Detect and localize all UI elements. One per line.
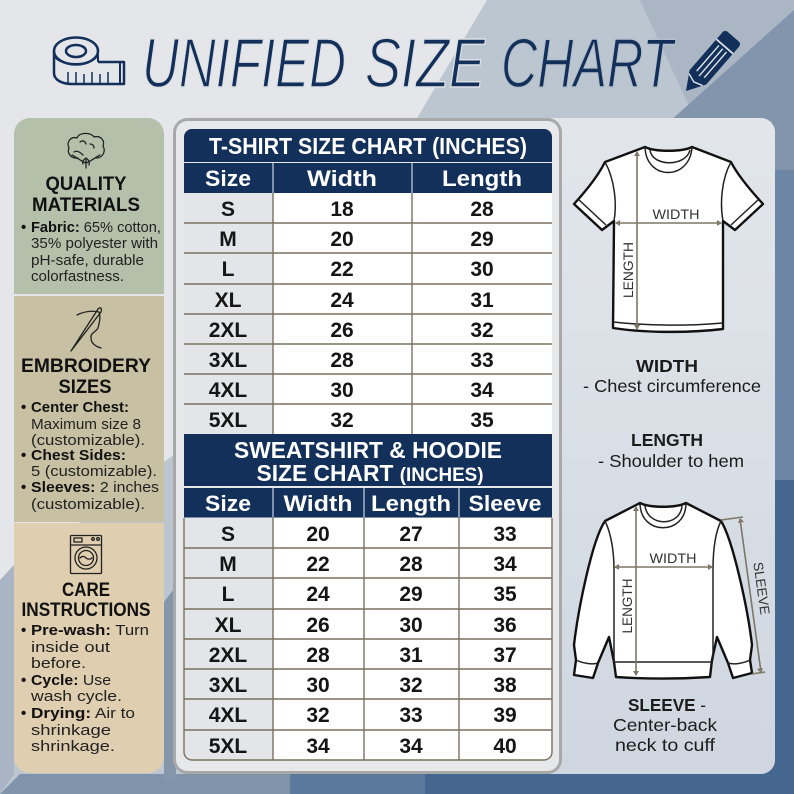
table body rows: 30 <box>306 674 330 697</box>
text block: care details: Drying: Air to <box>31 705 135 722</box>
icon: measuring tape <box>54 38 124 84</box>
icon: washing machine <box>70 536 102 574</box>
table header row: Sleeve <box>468 491 542 516</box>
table header row: Size <box>205 491 251 516</box>
table: t-shirt size chart <box>184 129 552 434</box>
length arrow <box>621 151 640 330</box>
table header row: Length <box>442 166 522 191</box>
text block: sleeve description: neck to cuff <box>615 735 715 755</box>
table body rows: 30 <box>330 379 354 402</box>
heading <box>21 356 151 398</box>
table body rows: 4XL <box>209 704 247 727</box>
text block: length description: - Shoulder to hem <box>598 451 744 471</box>
icon: pencil <box>678 29 742 98</box>
table body rows: 31 <box>470 289 494 312</box>
text block: fabric: colorfastness. <box>31 268 124 285</box>
text block: care details: Pre-wash: Turn <box>31 622 149 639</box>
table body rows <box>184 193 552 434</box>
table body rows: 24 <box>330 289 354 312</box>
table body rows: 34 <box>470 379 494 402</box>
panel: embroidery sizes <box>14 296 164 522</box>
table body rows: 30 <box>399 614 423 637</box>
heading: INSTRUCTIONS <box>22 600 150 621</box>
text block: care details: shrinkage. <box>31 738 115 755</box>
text block: fabric: Fabric: 65% cotton, <box>31 219 161 236</box>
text block: embroidery details: (customizable). <box>31 432 145 449</box>
text block: width description <box>583 356 761 396</box>
table body rows: 32 <box>306 704 330 727</box>
text block: embroidery details: • <box>21 447 26 464</box>
table body rows: M <box>219 553 237 576</box>
text block: embroidery details <box>21 399 159 513</box>
panel: table frame <box>174 120 560 772</box>
table body rows: 37 <box>493 644 517 667</box>
table body rows: XL <box>215 614 242 637</box>
table body rows: 5XL <box>209 409 247 432</box>
heading: sweatshirt chart: SIZE CHART (INCHES) <box>256 460 484 486</box>
text block: length description <box>598 430 744 471</box>
heading: CARE <box>62 580 110 601</box>
table body rows: 33 <box>399 704 423 727</box>
table body rows: 20 <box>330 228 354 251</box>
table body rows: 18 <box>330 198 354 221</box>
text block: care details: • <box>21 622 26 639</box>
table body rows: 32 <box>399 674 423 697</box>
table body rows: 3XL <box>209 674 247 697</box>
text block: care details: wash cycle. <box>30 688 122 705</box>
table body rows: 38 <box>493 674 517 697</box>
heading: t-shirt chart: T-SHIRT SIZE CHART (INCHES) <box>209 133 527 159</box>
text block: care details: • <box>21 672 26 689</box>
text block: fabric: 35% polyester with <box>31 235 158 252</box>
title: CHART <box>501 24 676 102</box>
table body rows: S <box>221 198 235 221</box>
text block: care details: shrinkage <box>31 722 111 739</box>
icon: needle <box>71 308 101 351</box>
table body rows: 33 <box>493 523 517 546</box>
table header row: Length <box>371 491 451 516</box>
title: SIZE <box>365 24 486 102</box>
table body rows: 39 <box>493 704 517 727</box>
table body rows: 5XL <box>209 735 247 758</box>
table body rows: 34 <box>306 735 330 758</box>
text block: fabric: pH-safe, durable <box>31 252 144 269</box>
text block: embroidery details: Maximum size 8 <box>31 416 141 433</box>
text block: embroidery details: 5 (customizable). <box>31 463 157 480</box>
table body rows: 34 <box>493 553 517 576</box>
text block: care details: inside out <box>31 639 111 656</box>
text block: embroidery details: Sleeves: 2 inches <box>31 479 159 496</box>
table body rows: L <box>222 258 235 281</box>
table body rows: 26 <box>330 319 354 342</box>
table body rows: 29 <box>399 583 423 606</box>
diagram: t-shirt <box>574 147 763 332</box>
length arrow: LENGTH <box>621 242 636 298</box>
table body rows: 24 <box>306 583 330 606</box>
table body rows: 40 <box>493 735 517 758</box>
heading <box>22 580 150 621</box>
table body rows: 32 <box>330 409 354 432</box>
table body rows: 34 <box>399 735 423 758</box>
table header row <box>184 488 552 518</box>
table body rows: 22 <box>330 258 354 281</box>
table body rows: 30 <box>470 258 494 281</box>
table body rows: 20 <box>306 523 330 546</box>
right panel <box>500 118 775 774</box>
table body rows: 29 <box>470 228 494 251</box>
table body rows: 4XL <box>209 379 247 402</box>
table body rows: 27 <box>399 523 423 546</box>
text block: care details: before. <box>31 655 86 672</box>
text block: sleeve description <box>613 695 717 755</box>
table body rows: 28 <box>399 553 423 576</box>
heading: MATERIALS <box>32 195 140 216</box>
heading <box>32 174 140 216</box>
width arrow: WIDTH <box>650 551 696 566</box>
title: UNIFIED <box>142 24 346 102</box>
text block: care details: Cycle: Use <box>31 672 111 689</box>
text block: embroidery details: • <box>21 479 26 496</box>
table body rows: 35 <box>493 583 517 606</box>
text block: care details: • <box>21 705 26 722</box>
sleeve arrow: SLEEVE <box>750 561 773 616</box>
table header row: Size <box>205 166 251 191</box>
width arrow <box>614 551 713 570</box>
table body rows: 33 <box>470 349 494 372</box>
text block: embroidery details: (customizable). <box>31 496 145 513</box>
table body rows: 2XL <box>209 644 247 667</box>
heading: sweatshirt chart <box>184 434 552 486</box>
table body rows: 3XL <box>209 349 247 372</box>
width arrow <box>615 207 722 226</box>
text block: fabric: • <box>21 219 26 236</box>
width arrow: WIDTH <box>652 207 700 222</box>
table body rows: 28 <box>330 349 354 372</box>
title <box>142 24 676 102</box>
text block: sleeve description: Center-back <box>613 715 717 735</box>
text block: embroidery details: • <box>21 399 26 416</box>
length arrow: LENGTH <box>620 578 635 634</box>
heading: QUALITY <box>46 174 127 195</box>
length arrow <box>620 506 639 676</box>
text block: care details <box>21 622 149 755</box>
text block: length description: LENGTH <box>631 430 703 450</box>
table body rows: 28 <box>470 198 494 221</box>
text block: embroidery details: Chest Sides: <box>31 447 126 464</box>
text block: width description: WIDTH <box>636 356 698 376</box>
panel: quality materials <box>14 118 164 294</box>
diagram: sweatshirt <box>574 503 773 678</box>
table body rows: 36 <box>493 614 517 637</box>
table body rows <box>184 518 552 760</box>
table header row: Width <box>284 491 352 516</box>
table body rows: 32 <box>470 319 494 342</box>
table body rows: M <box>219 228 237 251</box>
heading: SIZES <box>58 377 112 398</box>
heading: EMBROIDERY <box>21 356 151 377</box>
table body rows: 26 <box>306 614 330 637</box>
table header row: Width <box>307 166 377 191</box>
table: sweatshirt and hoodie size chart <box>184 434 552 760</box>
panel: care instructions <box>14 523 164 773</box>
text block: sleeve description: SLEEVE - <box>628 695 706 715</box>
icon: cotton <box>68 133 104 168</box>
table body rows: 2XL <box>209 319 247 342</box>
table body rows: 35 <box>470 409 494 432</box>
table body rows: 31 <box>399 644 423 667</box>
table body rows: S <box>221 523 235 546</box>
table header row <box>184 163 552 193</box>
text block: width description: - Chest circumference <box>583 376 761 396</box>
table body rows: L <box>222 583 235 606</box>
table body rows: 22 <box>306 553 330 576</box>
text block: fabric <box>21 219 161 285</box>
table body rows: XL <box>215 289 242 312</box>
heading: sweatshirt chart: SWEATSHIRT & HOODIE <box>234 437 502 463</box>
text block: embroidery details: Center Chest: <box>31 399 129 416</box>
sleeve arrow <box>721 517 773 674</box>
table body rows: 28 <box>306 644 330 667</box>
